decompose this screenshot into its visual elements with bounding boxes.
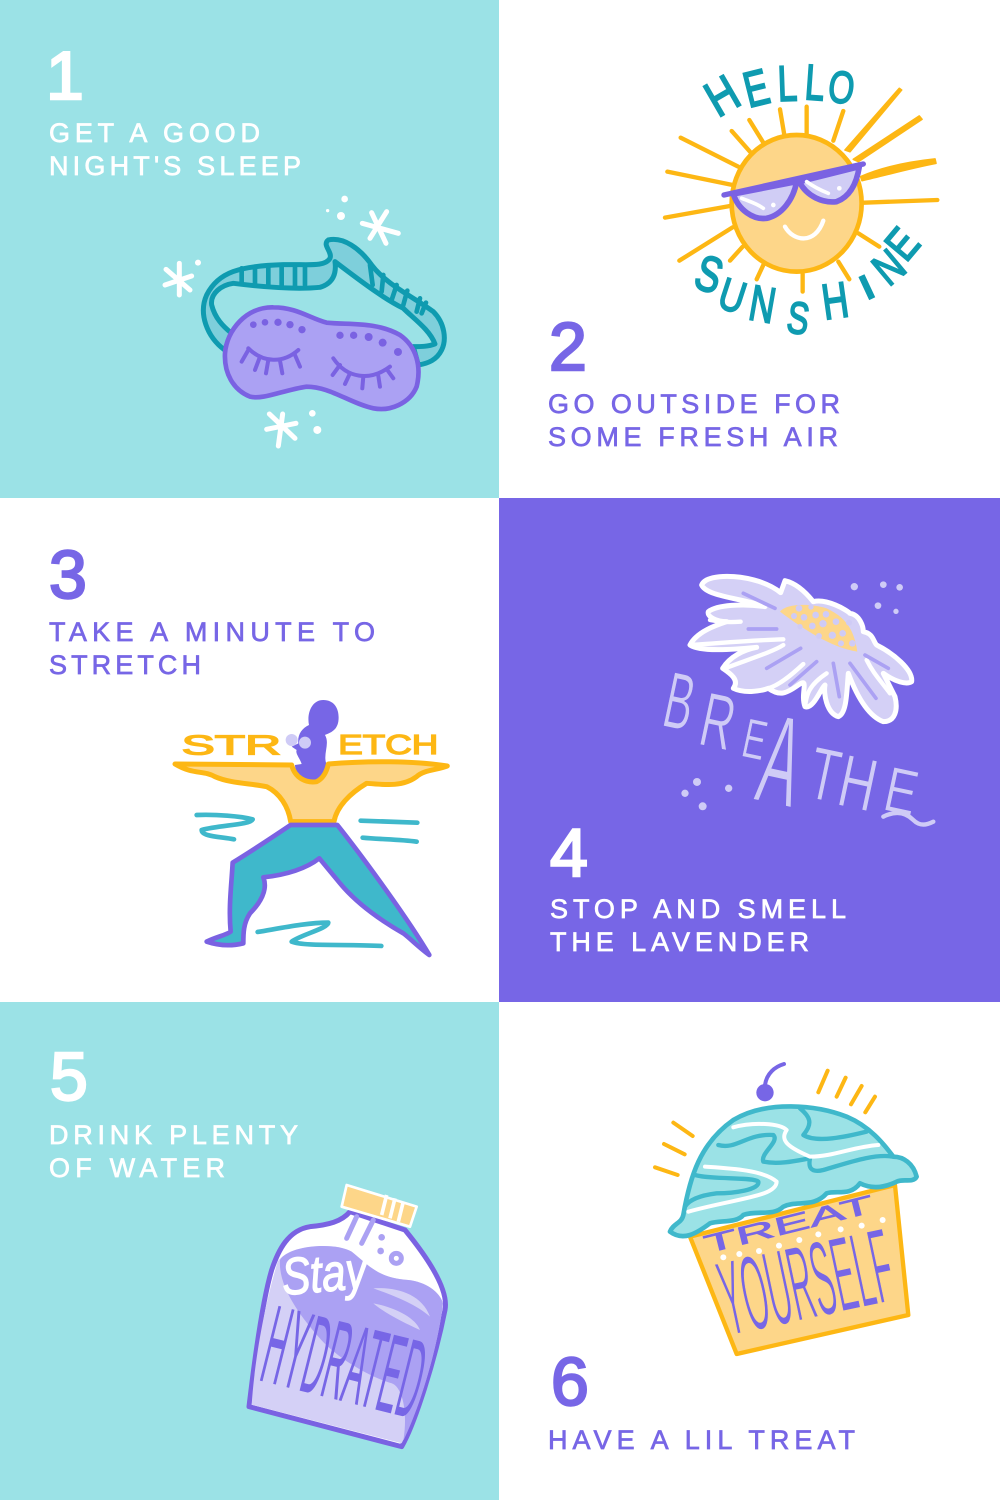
number 6: 6 [551, 1344, 589, 1420]
icon: hello sunshine [665, 55, 937, 345]
heading 4 [550, 894, 846, 957]
hand lettering: yourself: YOURSELF [709, 1207, 903, 1359]
heading 3: TAKE A MINUTE TO [49, 617, 375, 647]
icon: sleep mask [165, 196, 444, 446]
hand lettering: sunshine [688, 218, 930, 345]
hand lettering: sunshine: I [853, 267, 882, 308]
panel 5: water [0, 1002, 499, 1500]
heading 1 [49, 118, 301, 181]
heading 1: NIGHT'S SLEEP [49, 151, 301, 181]
icon: warrior pose figure [175, 700, 447, 955]
number 3: 3 [49, 537, 87, 613]
hand lettering: hello [695, 55, 858, 127]
panel 6: treat [499, 1002, 1000, 1500]
hand lettering: breathe: T [802, 732, 848, 819]
hand lettering: hello: L [803, 55, 827, 112]
hand lettering: sunshine: S [784, 292, 812, 345]
heading 6: HAVE A LIL TREAT [548, 1425, 855, 1455]
hand lettering: stretch [182, 729, 438, 761]
hand lettering: breathe: A [747, 688, 815, 836]
heading 2: GO OUTSIDE FOR [548, 389, 840, 419]
heading 3: STRETCH [49, 650, 201, 680]
heading 2 [548, 389, 840, 452]
heading 5 [49, 1120, 298, 1183]
hand lettering: stretch: STR [182, 730, 281, 761]
hand lettering: hello: O [825, 61, 858, 115]
hand lettering: stretch: ETCH [338, 729, 438, 760]
heading 5: OF WATER [49, 1153, 225, 1183]
hand lettering: hello: H [695, 64, 749, 127]
panel 1: sleep [0, 0, 499, 498]
hand lettering: breathe: E [737, 706, 773, 772]
hand lettering: sunshine: U [713, 268, 752, 324]
panel 4: lavender [499, 498, 1000, 1002]
panel 3: stretch [0, 498, 499, 1002]
hand lettering: hello: L [777, 56, 798, 113]
hand lettering: breathe: R [693, 677, 743, 768]
hand lettering: stay: Stay [279, 1240, 371, 1306]
hand lettering: sunshine: S [688, 245, 729, 305]
hand lettering: sunshine: N [863, 239, 915, 295]
hand lettering: hello: E [738, 60, 775, 119]
panel 2: fresh air [499, 0, 1000, 498]
icon: cupcake [655, 1064, 917, 1359]
heading 1: GET A GOOD [49, 118, 260, 148]
heading 4: THE LAVENDER [550, 927, 809, 957]
heading 2: SOME FRESH AIR [548, 422, 838, 452]
hand lettering: sunshine: E [875, 218, 930, 270]
heading 4: STOP AND SMELL [550, 894, 846, 924]
number 4: 4 [550, 815, 588, 891]
hand lettering: sunshine: N [745, 275, 780, 335]
hand lettering: breathe [656, 655, 924, 836]
number 5: 5 [50, 1039, 88, 1115]
hand lettering: treat: TREAT [701, 1190, 876, 1260]
hand lettering: breathe: E [878, 753, 924, 829]
number 1: 1 [46, 38, 84, 114]
hand lettering: sunshine: H [819, 273, 852, 331]
number 2: 2 [549, 309, 587, 385]
hand lettering: breathe: H [831, 738, 885, 828]
heading 5: DRINK PLENTY [49, 1120, 298, 1150]
icon: flower with breathe lettering [656, 576, 933, 836]
icon: water bottle [249, 1185, 445, 1447]
heading 3 [49, 617, 375, 680]
hand lettering: breathe: B [656, 655, 703, 748]
hand lettering: hydrated: HYDRATED [252, 1283, 437, 1443]
